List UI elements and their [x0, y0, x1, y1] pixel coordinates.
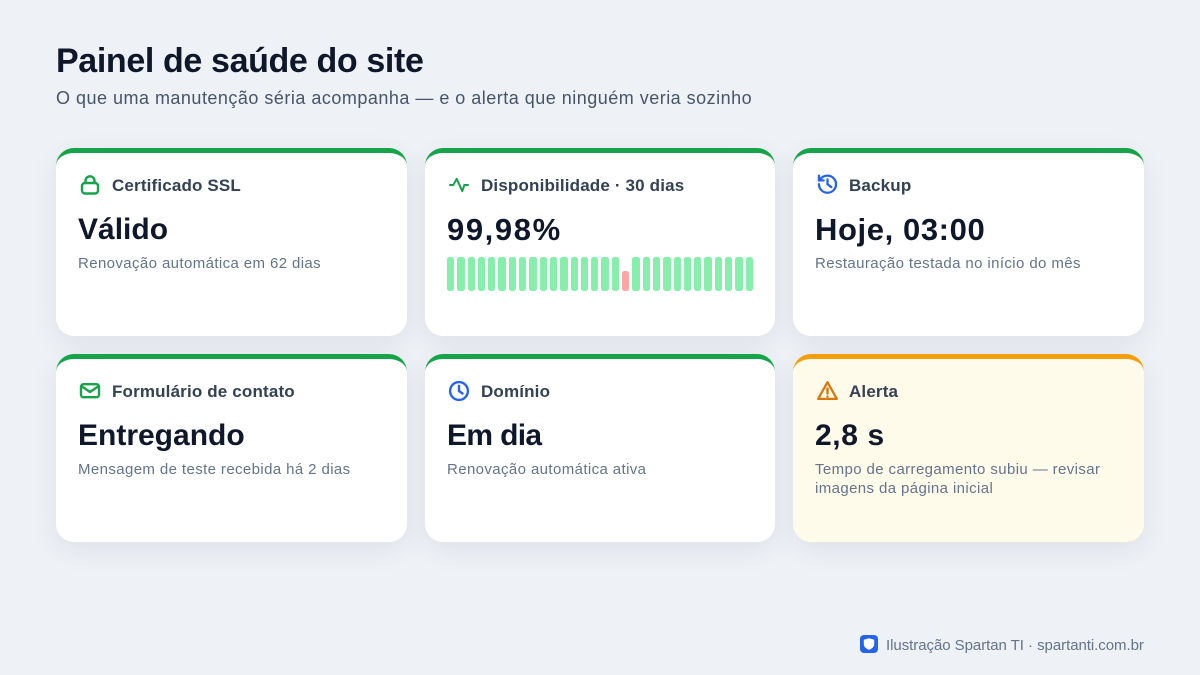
- value: Hoje, 03:00: [815, 212, 985, 247]
- description: Restauração testada no início do mês: [815, 255, 1081, 272]
- credit text: Ilustração Spartan TI · spartanti.com.br: [886, 637, 1144, 654]
- description: Renovação automática em 62 dias: [78, 255, 321, 272]
- value: Em dia: [447, 419, 541, 452]
- value: 2,8 s: [815, 419, 885, 452]
- panel: alerta: [793, 354, 1144, 542]
- icon: warning triangle: [817, 381, 838, 400]
- label: Alerta: [849, 382, 898, 401]
- value: Entregando: [78, 419, 245, 452]
- panel: backup: [793, 148, 1144, 336]
- icon: shield logo: [860, 635, 878, 653]
- icon: lock: [80, 175, 100, 195]
- label: Certificado SSL: [112, 176, 241, 195]
- icon: activity: [449, 178, 469, 192]
- panel: formulário de contato: [56, 354, 407, 542]
- panel: domínio: [425, 354, 775, 542]
- description: imagens da página inicial: [815, 480, 993, 497]
- label: Backup: [849, 176, 911, 195]
- panel: certificado SSL: [56, 148, 407, 336]
- footer credit: [860, 635, 1144, 654]
- value: Válido: [78, 213, 168, 246]
- icon: mail: [80, 383, 100, 398]
- description: Mensagem de teste recebida há 2 dias: [78, 461, 351, 478]
- bar chart: 30 days uptime: [447, 257, 753, 291]
- description: [815, 461, 1100, 497]
- label: Disponibilidade · 30 dias: [481, 176, 684, 195]
- label: Domínio: [481, 382, 550, 401]
- subtitle: O que uma manutenção séria acompanha — e o alerta que ninguém veria sozinho: [56, 88, 752, 108]
- label: Formulário de contato: [112, 382, 295, 401]
- description: Renovação automática ativa: [447, 461, 646, 478]
- icon: history: [818, 174, 838, 194]
- description: Tempo de carregamento subiu — revisar: [815, 461, 1100, 478]
- value: 99,98%: [447, 212, 562, 247]
- panel: disponibilidade: [425, 148, 775, 336]
- title: Painel de saúde do site: [56, 42, 424, 80]
- icon: clock: [448, 380, 470, 402]
